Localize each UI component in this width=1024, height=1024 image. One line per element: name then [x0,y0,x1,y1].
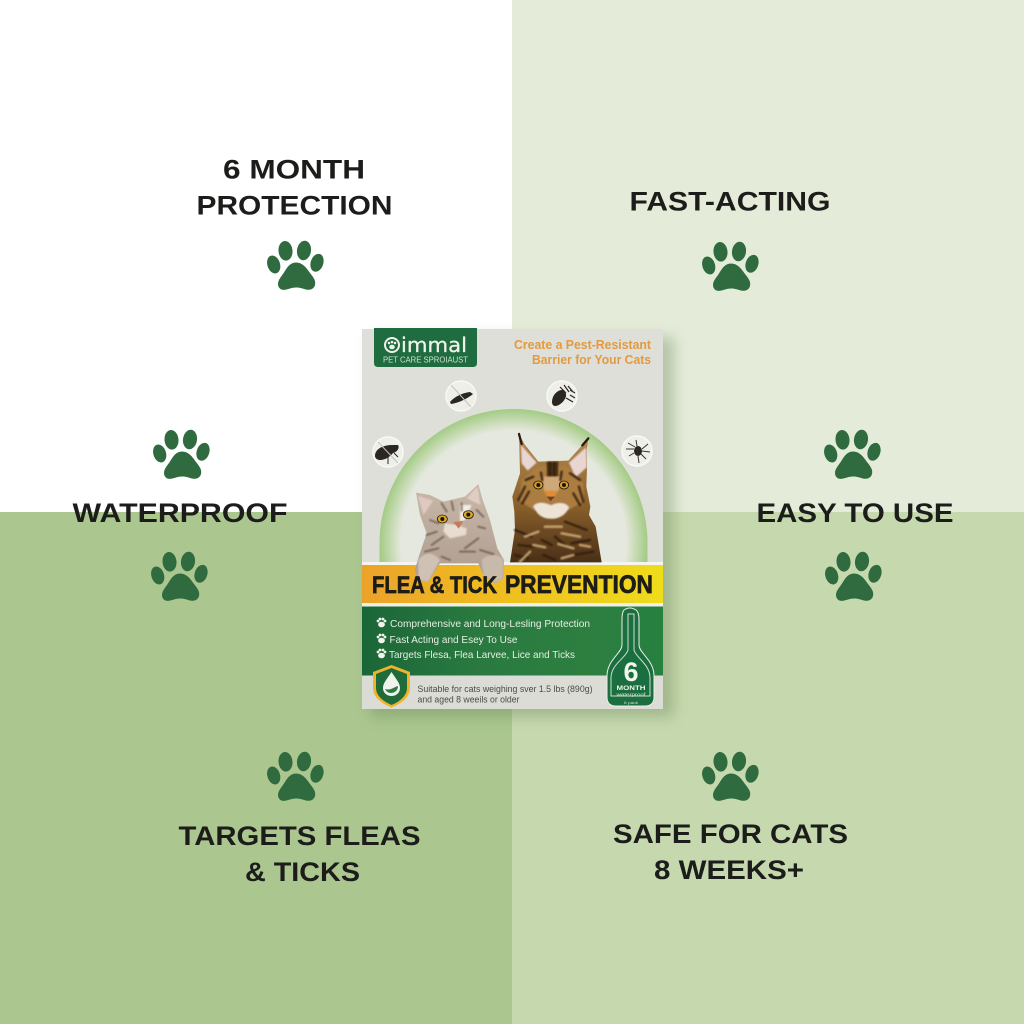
icon: paw bottom right [700,751,761,801]
benefits panel: Targets Flesa, Flea Larvee, Lice and Ticks [389,649,575,661]
benefits panel [362,603,663,676]
icon: applicator bottle: waterproof [616,692,647,697]
heading: 6 month protection: 6 MONTH [223,154,365,184]
heading: fast-acting: FAST-ACTING [630,186,830,216]
icon: paw left lower [149,551,210,601]
icon: paw bottom left [265,751,326,801]
heading: 6 month protection [196,154,392,220]
box face [362,329,663,709]
heading: safe for cats: SAFE FOR CATS [613,819,848,849]
title band text: PREVENTION [505,571,653,599]
heading: waterproof: WATERPROOF [72,498,288,528]
icon: applicator bottle: MONTH [616,685,646,692]
tagline: Barrier for Your Cats [532,353,651,367]
icon: applicator bottle: 6 [623,657,639,687]
icon: paw right upper [822,429,883,479]
logo badge: immal [401,333,467,357]
benefits panel: Comprehensive and Long-Lesling Protection [390,618,590,630]
box shadow [370,337,674,717]
logo badge [374,328,477,367]
heading: easy to use: EASY TO USE [756,498,954,528]
icon: applicator bottle: 6 pack [624,701,638,705]
heading: safe for cats: 8 WEEKS+ [654,855,804,885]
heading: targets fleas and ticks: & TICKS [245,857,360,887]
heading: targets fleas and ticks [178,821,420,887]
suitability strip [362,676,663,709]
title band background [362,562,663,603]
logo badge: PET CARE SPROIAUST [383,356,468,364]
tagline [514,338,652,367]
product box [362,328,674,717]
benefits panel: Fast Acting and Esey To Use [390,634,518,646]
icon: paw top right [700,241,761,291]
suitability strip: Suitable for cats weighing sver 1.5 lbs (890g) [418,684,592,694]
green arc backdrop [380,409,648,562]
suitability strip: and aged 8 weeils or older [418,694,520,704]
icon: paw top left [265,240,326,290]
title band text: FLEA & TICK [372,572,498,599]
heading: 6 month protection: PROTECTION [196,190,392,220]
title band text [372,571,653,599]
heading: safe for cats [613,819,848,885]
illustration: large cat [510,434,602,562]
icon: pest badges [373,381,652,467]
icon: paw right lower [823,551,884,601]
tagline: Create a Pest-Resistant [514,338,652,352]
icon: shield badge [373,665,410,708]
icon: paw left upper [151,429,212,479]
illustration: small cat [415,484,504,583]
icon: applicator bottle [607,608,654,706]
heading: targets fleas and ticks: TARGETS FLEAS [178,821,420,851]
